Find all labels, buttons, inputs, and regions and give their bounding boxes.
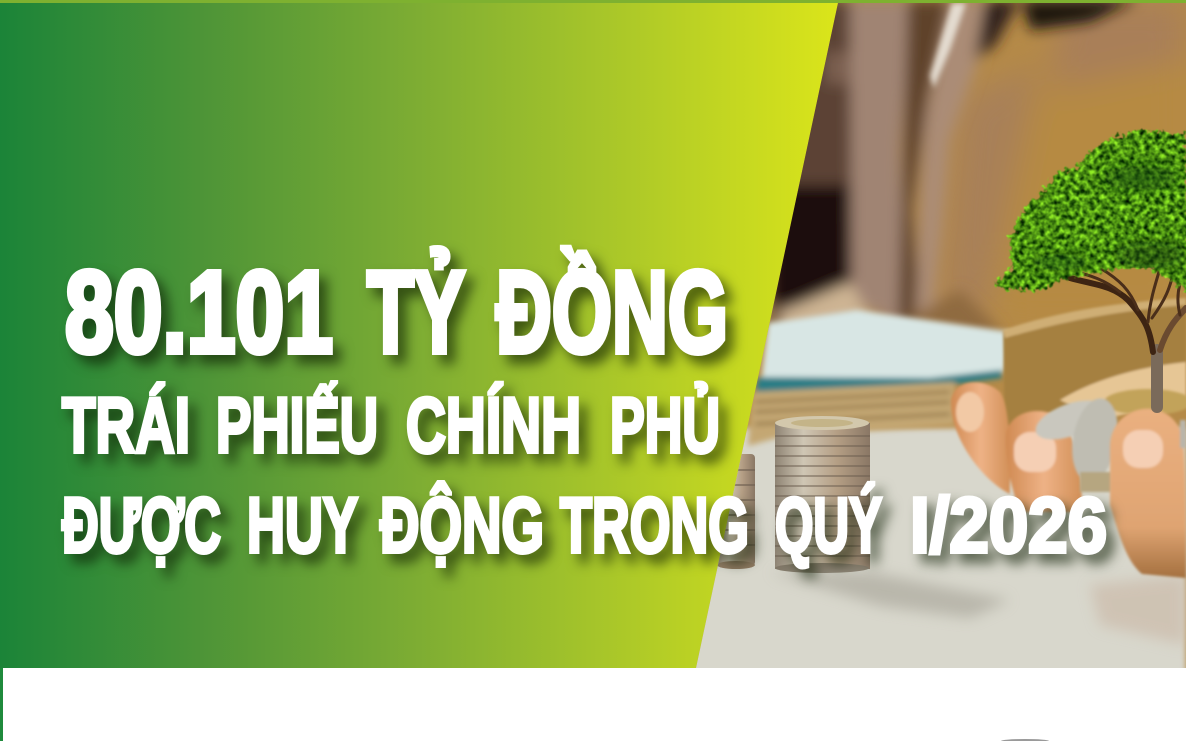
title block	[62, 247, 1107, 569]
thumb finger	[1110, 409, 1186, 578]
title line 1: TỶ	[367, 247, 465, 377]
title line 3: I/2026	[910, 481, 1107, 569]
coin stack: large	[775, 416, 870, 573]
partial grey element at bottom edge	[1001, 739, 1049, 741]
title line 2: CHÍNH	[406, 381, 581, 469]
notebook	[748, 310, 1012, 446]
shadow on table	[770, 572, 1186, 645]
green gradient banner	[0, 0, 838, 668]
tree crown	[994, 130, 1186, 292]
title line 3: ĐỘNG	[380, 481, 544, 569]
photo: tree growing from coins in a hand	[690, 0, 1186, 678]
title line 3: ĐƯỢC	[62, 481, 221, 569]
title line 3: TRONG	[560, 481, 749, 569]
tree trunk and branches	[1070, 262, 1186, 407]
hand and fingers	[951, 382, 1082, 512]
title line 2: TRÁI	[62, 381, 190, 469]
title line 2: PHỦ	[610, 381, 720, 469]
coins held in hand	[1031, 389, 1186, 492]
title line 2: PHIẾU	[216, 381, 378, 469]
top green strip	[0, 0, 1186, 3]
coin stack: small	[717, 454, 755, 569]
title line 3: QUÝ	[775, 481, 882, 569]
title line 1: ĐỒNG	[496, 247, 728, 377]
left green edge	[0, 668, 3, 741]
title line 3: HUY	[247, 481, 357, 569]
title line 1: 80.101	[65, 247, 333, 377]
table surface	[690, 428, 1186, 678]
paper bag	[1003, 298, 1186, 440]
blurred shirt background	[770, 0, 1186, 340]
